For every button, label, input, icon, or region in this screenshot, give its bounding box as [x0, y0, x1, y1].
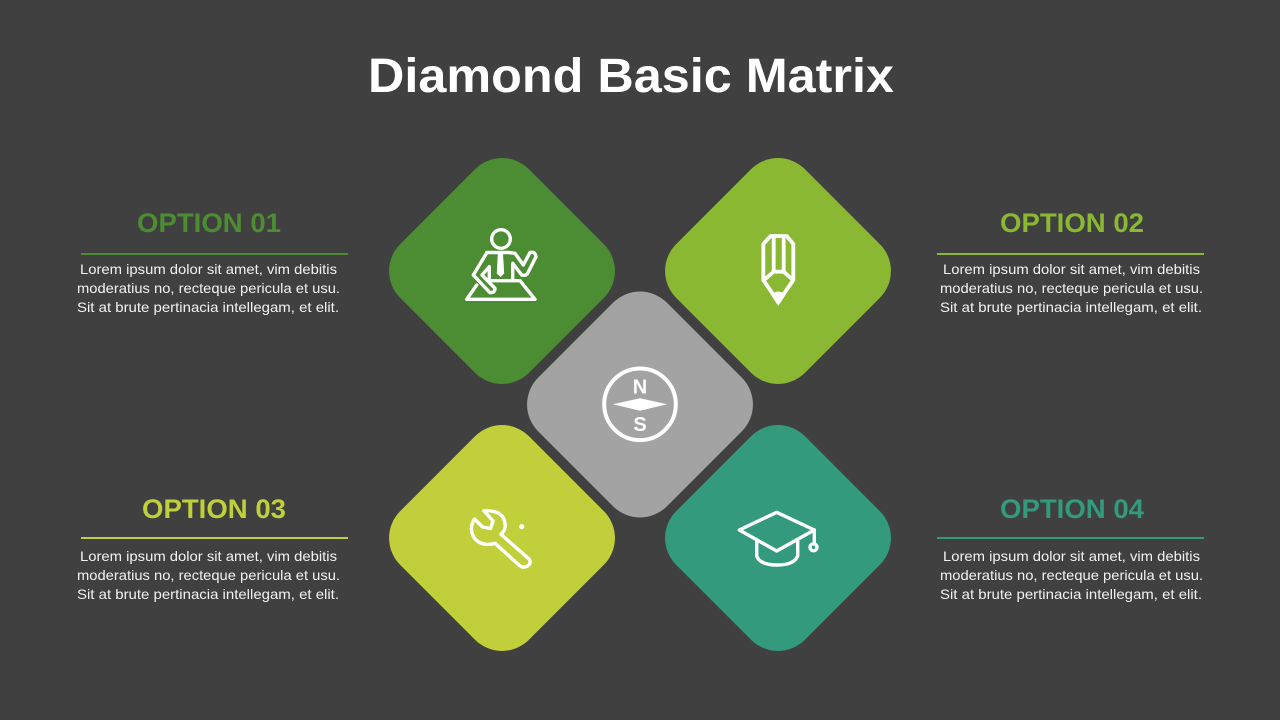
body text: option 03: moderatius no, recteque pericula et usu. — [77, 567, 340, 583]
icon: businessman at desk — [467, 230, 536, 299]
body text: option 01: Sit at brute pertinacia intellegam, et elit. — [77, 299, 339, 315]
text panel: option 02: OPTION 02 — [1000, 208, 1144, 238]
text panel: option 03 — [77, 494, 348, 602]
body text: option 01: moderatius no, recteque pericula et usu. — [77, 280, 340, 296]
icon: wrench — [471, 511, 530, 567]
body text: option 04: moderatius no, recteque pericula et usu. — [940, 567, 1203, 583]
body text: option 02: moderatius no, recteque pericula et usu. — [940, 280, 1203, 296]
text panel: option 02 — [937, 208, 1204, 315]
icon: compass: N — [633, 376, 647, 398]
diamond: centre — [511, 276, 769, 533]
diamond: option 02 — [649, 142, 907, 400]
body text: option 04 — [940, 548, 1203, 602]
body text: option 04: Sit at brute pertinacia intellegam, et elit. — [940, 586, 1202, 602]
body text: option 04: Lorem ipsum dolor sit amet, vim debitis — [943, 548, 1200, 564]
icon: compass: S — [633, 414, 647, 436]
icon: graduation cap — [739, 512, 817, 565]
text panel: option 03: OPTION 03 — [142, 494, 286, 524]
body text: option 02: Lorem ipsum dolor sit amet, vim debitis — [943, 261, 1200, 277]
diamond: option 03 — [373, 409, 631, 667]
body text: option 01: Lorem ipsum dolor sit amet, vim debitis — [80, 261, 337, 277]
body text: option 01 — [77, 261, 340, 315]
diamond: option 04 — [649, 409, 907, 667]
diamond: option 01 — [373, 142, 631, 400]
body text: option 03: Lorem ipsum dolor sit amet, vim debitis — [80, 548, 337, 564]
text panel: option 04 — [937, 494, 1204, 602]
title: Diamond Basic Matrix — [368, 50, 894, 103]
body text: option 02 — [940, 261, 1203, 315]
body text: option 03: Sit at brute pertinacia intellegam, et elit. — [77, 586, 339, 602]
icon: pencil — [763, 236, 793, 306]
text panel: option 04: OPTION 04 — [1000, 494, 1144, 524]
body text: option 03 — [77, 548, 340, 602]
icon: compass — [604, 368, 676, 440]
text panel: option 01: OPTION 01 — [137, 208, 281, 238]
text panel: option 01 — [77, 208, 348, 315]
body text: option 02: Sit at brute pertinacia intellegam, et elit. — [940, 299, 1202, 315]
